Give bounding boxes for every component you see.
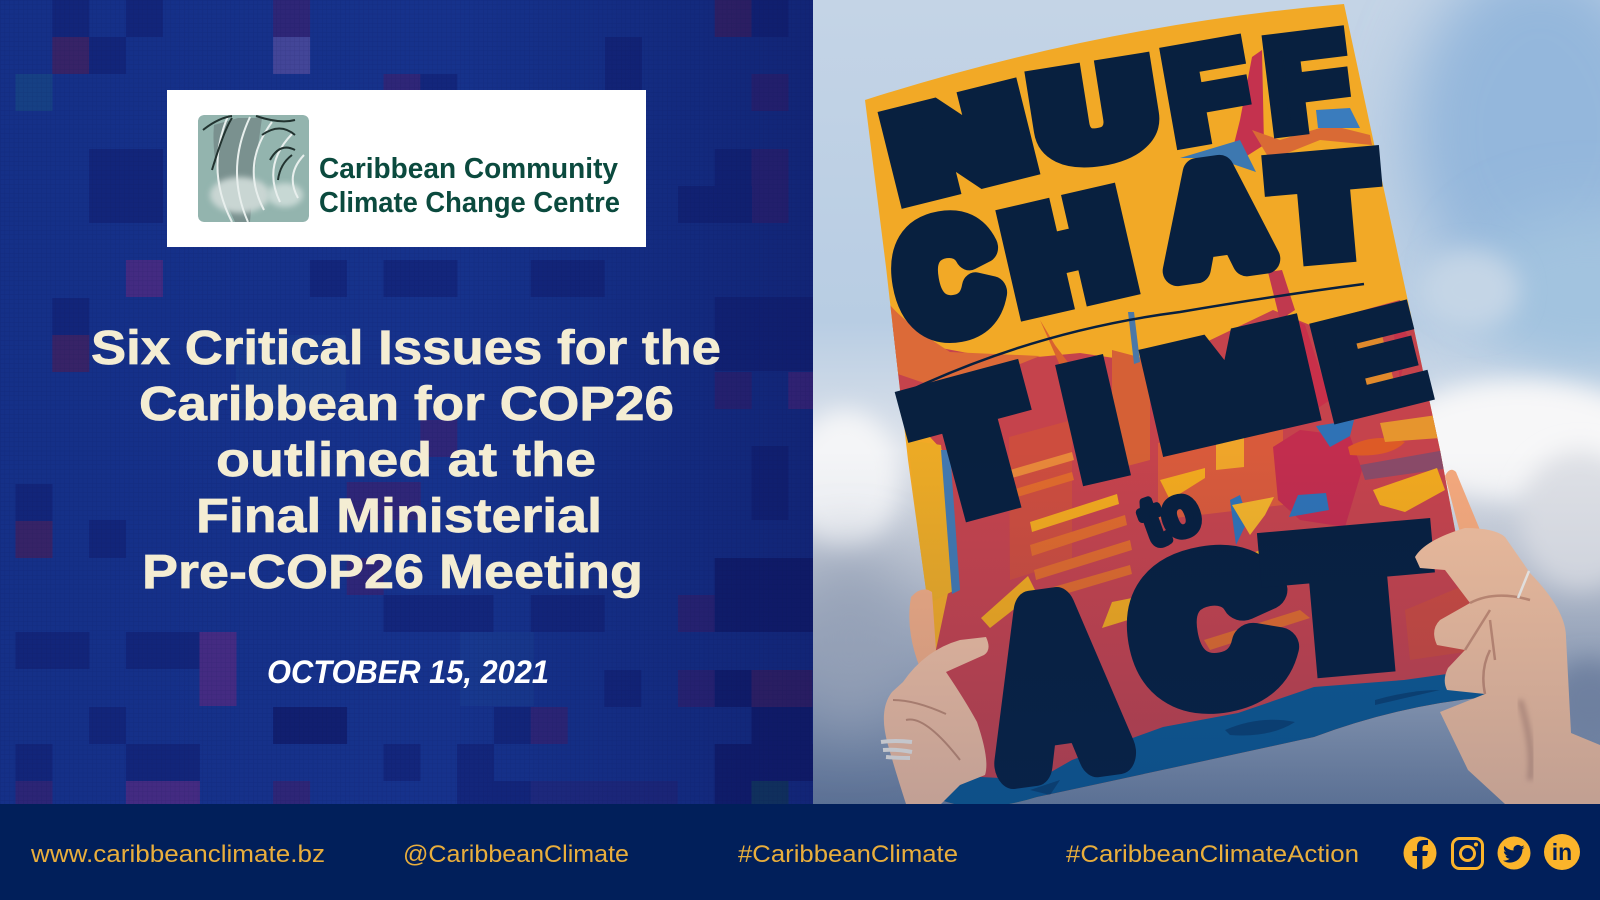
left hand xyxy=(881,589,989,804)
title: outlined at the xyxy=(216,434,596,487)
panel: photo of hands holding a protest poster xyxy=(790,0,1600,830)
title: Final Ministerial xyxy=(196,490,602,543)
title: Pre-COP26 Meeting xyxy=(142,546,643,599)
logo wordmark xyxy=(319,153,620,219)
poster words: ACT: T xyxy=(1277,503,1423,698)
icon: linkedin xyxy=(1544,834,1580,870)
poster words: TIME: M xyxy=(1143,303,1317,468)
date: OCTOBER 15, 2021 xyxy=(267,654,549,690)
poster words: ACT: A xyxy=(981,559,1129,812)
poster word: to: to xyxy=(1130,470,1210,561)
footer bar xyxy=(0,804,1600,900)
title: Caribbean for COP26 xyxy=(139,378,674,431)
poster words: CHAT: C xyxy=(888,190,1006,364)
icon: linkedin: in xyxy=(1552,839,1572,865)
poster: underline stroke xyxy=(913,284,1364,389)
poster words: CHAT: T xyxy=(1274,133,1376,281)
footer: website: www.caribbeanclimate.bz xyxy=(30,841,325,868)
poster xyxy=(850,0,1510,830)
poster words: NUFF xyxy=(878,25,1352,209)
right hand: ring xyxy=(1518,571,1529,598)
icon: instagram xyxy=(1452,838,1482,868)
logo wordmark: Climate Change Centre xyxy=(319,187,620,219)
footer: handle: @CaribbeanClimate xyxy=(403,841,629,868)
bottom photo tint xyxy=(813,512,1600,804)
poster words: TIME: T xyxy=(905,347,1045,543)
poster: blue wave along the bottom edge xyxy=(944,674,1485,804)
poster words: TIME: I xyxy=(1057,341,1128,499)
footer: action hashtag: #CaribbeanClimateAction xyxy=(1066,841,1359,868)
title: Six Critical Issues for the xyxy=(91,322,721,375)
logo emblem xyxy=(198,115,309,222)
logo wordmark: Caribbean Community xyxy=(319,153,618,185)
panel: blue mosaic background xyxy=(0,0,814,804)
poster words: CHAT: H xyxy=(999,171,1137,333)
logo card xyxy=(167,90,646,247)
footer: hashtag: #CaribbeanClimate xyxy=(738,841,958,868)
poster words: NUFF: F xyxy=(1259,8,1355,158)
poster words: CHAT xyxy=(891,145,1382,343)
poster words: NUFF: N xyxy=(882,69,1036,218)
poster words: TIME: E xyxy=(1304,282,1436,443)
poster words: ACT xyxy=(994,518,1435,789)
poster words: NUFF: F xyxy=(1156,16,1259,169)
poster words: TIME xyxy=(894,299,1435,522)
icon: facebook xyxy=(1404,836,1436,870)
title xyxy=(91,322,721,599)
sky background xyxy=(790,0,1600,804)
left hand: rings xyxy=(881,741,912,758)
poster words: NUFF: U xyxy=(1030,41,1160,185)
poster words: CHAT: A xyxy=(1157,136,1273,301)
poster words: ACT: C xyxy=(1124,518,1296,742)
icon: twitter xyxy=(1498,836,1530,870)
right hand xyxy=(1415,470,1600,804)
